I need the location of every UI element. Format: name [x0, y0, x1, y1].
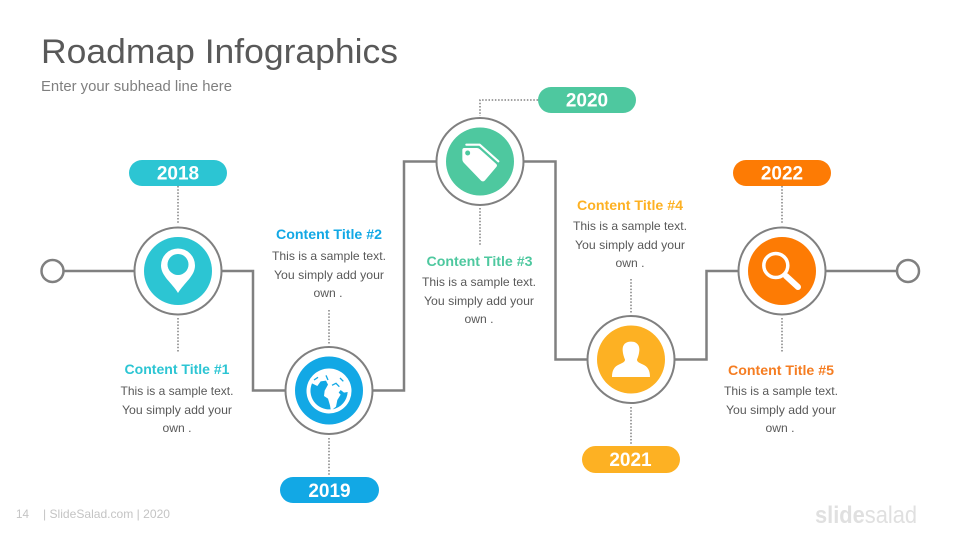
milestone 3: 2020 [422, 87, 636, 326]
icon: globe [286, 347, 372, 434]
text block 3: You simply add your [424, 294, 534, 308]
text block 3: This is a sample text. [422, 275, 536, 289]
text block 1: Content Title #1 [124, 361, 230, 377]
text block 4: This is a sample text. [573, 219, 687, 233]
year pill 2021 [582, 446, 680, 473]
text block 2: Content Title #2 [276, 226, 382, 242]
text block 1: You simply add your [122, 403, 232, 417]
dotted connectors 2 [328, 310, 330, 476]
year pill 2020: 2020 [566, 90, 608, 112]
year pill 2022 [733, 160, 831, 186]
roadmap connector line [42, 162, 919, 390]
text block 4: You simply add your [575, 238, 685, 252]
text block 2: You simply add your [274, 268, 384, 282]
year pill 2021: 2021 [609, 450, 652, 471]
text block 3: Content Title #3 [426, 253, 533, 269]
year pill 2019: 2019 [308, 481, 351, 502]
footer page number and source: | SlideSalad.com | 2020 [43, 507, 170, 521]
text block 3: own . [464, 312, 494, 326]
text block 5: own . [766, 421, 794, 435]
subhead: Enter your subhead line here [41, 78, 232, 95]
year pill 2018 [129, 160, 227, 186]
text block 1 [120, 361, 234, 435]
text block 2: This is a sample text. [272, 249, 386, 263]
milestone 1: 2018 [120, 160, 234, 435]
text block 4 [573, 197, 687, 270]
icon: price tag [436, 118, 524, 205]
text block 5: Content Title #5 [728, 362, 834, 378]
text block 1: own . [162, 421, 192, 435]
dotted connectors 3 [480, 100, 538, 245]
year pill 2018: 2018 [157, 164, 199, 184]
milestone 2: 2019 [272, 226, 386, 503]
milestone 4: 2021 [573, 197, 687, 473]
icon: location pin [134, 228, 222, 314]
text block 5 [724, 362, 838, 435]
milestone 5: 2022 [724, 160, 838, 435]
dotted connectors 1 [177, 186, 179, 352]
year pill 2020 [538, 87, 636, 113]
dotted connectors 5 [781, 186, 783, 352]
text block 4: Content Title #4 [577, 197, 683, 213]
icon: magnifier [738, 228, 826, 314]
year pill 2022: 2022 [761, 164, 803, 184]
text block 5: This is a sample text. [724, 384, 838, 398]
text block 1: This is a sample text. [120, 384, 234, 398]
text block 3 [422, 253, 536, 326]
icon: person [588, 316, 674, 403]
text block 2 [272, 226, 386, 300]
text block 4: own . [616, 256, 644, 270]
text block 2: own . [314, 286, 342, 300]
title: Roadmap Infographics [41, 33, 398, 71]
year pill 2019 [280, 477, 379, 503]
watermark logo: slidesalad [815, 502, 917, 529]
dotted connectors 4 [630, 279, 632, 445]
text block 5: You simply add your [726, 403, 836, 417]
footer page number and source: 14 [16, 507, 29, 521]
